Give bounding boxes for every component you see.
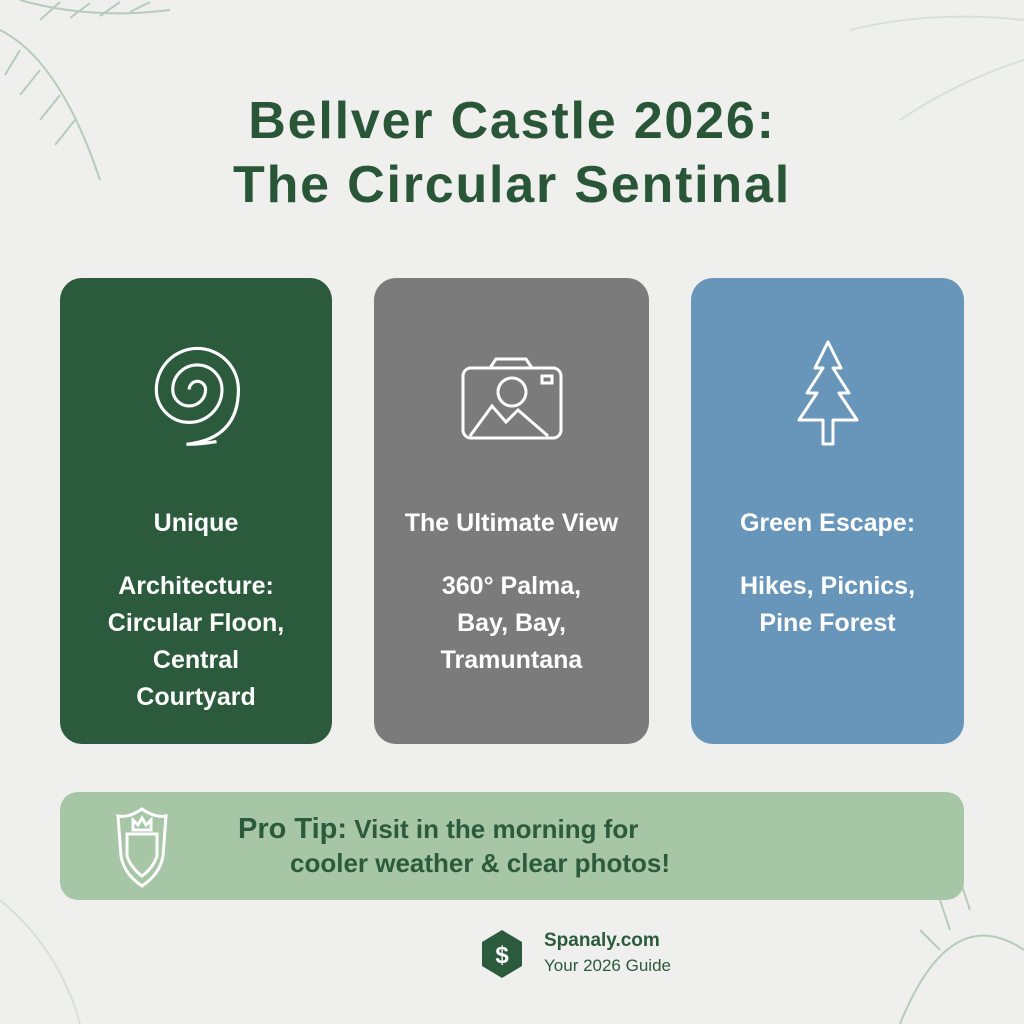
panel: pro tip (60, 792, 964, 900)
text: Circular Floon, (108, 609, 284, 637)
text: Green Escape: (740, 509, 915, 537)
text: Central (153, 646, 239, 674)
text: Unique (154, 509, 238, 537)
text: Bay, Bay, (457, 609, 566, 637)
logo (482, 930, 671, 978)
text: Hikes, Picnics, (740, 572, 915, 600)
logo: Spanaly.com (544, 930, 660, 951)
text: Pro Tip: Visit in the morning for (238, 813, 638, 845)
icon: pine tree (797, 340, 858, 446)
text: Tramuntana (441, 646, 582, 674)
icon: dollar hexagon: $ (495, 942, 509, 969)
text: 360° Palma, (442, 572, 581, 600)
logo: Your 2026 Guide (544, 956, 671, 975)
title: The Circular Sentinal (233, 156, 791, 214)
text: The Ultimate View (405, 509, 618, 537)
title: Bellver Castle 2026: (248, 92, 776, 150)
icon: dollar hexagon (482, 930, 522, 978)
text (238, 813, 670, 878)
icon: camera (462, 358, 562, 440)
icon: shield (116, 807, 168, 888)
panel: architecture (60, 278, 332, 744)
panel: green escape (691, 278, 964, 744)
text (405, 509, 618, 674)
text (740, 509, 915, 637)
text: cooler weather & clear photos! (290, 848, 670, 878)
title (233, 92, 791, 214)
text: Architecture: (118, 572, 274, 600)
text: Courtyard (136, 683, 256, 711)
icon: spiral (154, 346, 240, 446)
panel: view (374, 278, 649, 744)
text: Pine Forest (759, 609, 896, 637)
text (108, 509, 284, 711)
